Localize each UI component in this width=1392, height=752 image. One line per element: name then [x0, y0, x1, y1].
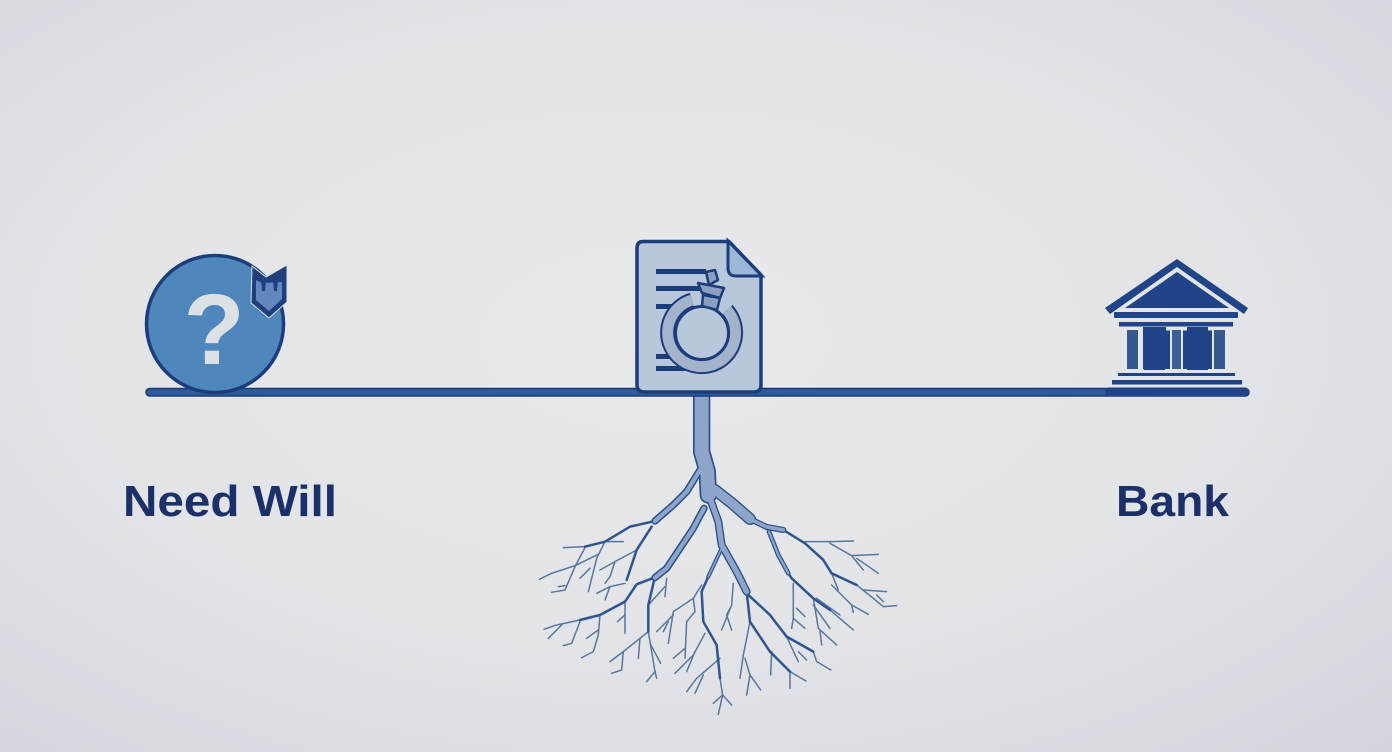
- ring: [668, 300, 736, 367]
- icon: question mark coin: [146, 256, 287, 392]
- label: Bank: Bank: [1116, 477, 1230, 526]
- light fill of major roots: [655, 395, 788, 592]
- building body: [1143, 327, 1212, 370]
- ring setting: [698, 270, 724, 310]
- medium roots: [580, 521, 857, 678]
- page fold: [728, 241, 762, 276]
- fine root branches: [539, 541, 897, 714]
- icon: document with ring: [637, 241, 762, 392]
- balance beam: [146, 388, 1249, 396]
- roof: [1105, 259, 1248, 314]
- label: Need Will: Need Will: [123, 477, 337, 526]
- icon: small shield badge: [251, 265, 287, 318]
- dark outlines of major roots: [655, 395, 788, 592]
- columns: [1120, 327, 1232, 372]
- roots under the document: [539, 395, 897, 714]
- text lines: [656, 269, 706, 371]
- question mark: ?: [183, 274, 245, 386]
- icon: bank building: [1105, 259, 1249, 396]
